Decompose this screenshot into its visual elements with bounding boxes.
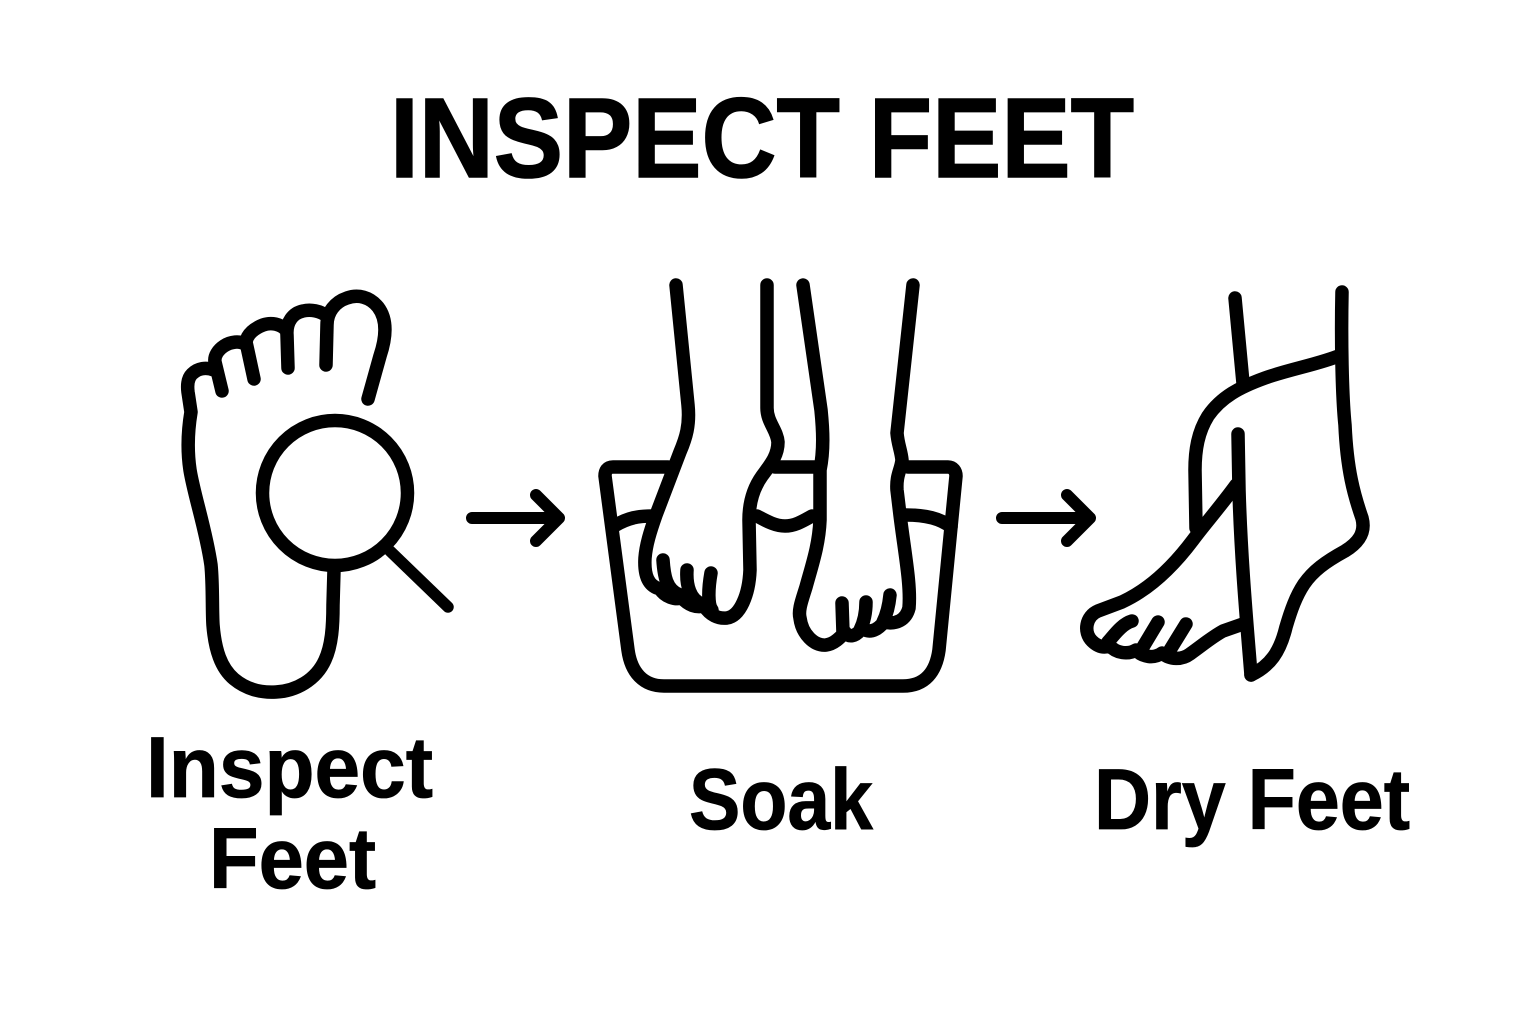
label: inspect feet: Feet — [209, 811, 376, 907]
label: inspect feet: Inspect — [146, 720, 433, 816]
magnifying glass handle — [390, 551, 448, 607]
arrow: inspect to soak — [472, 495, 559, 541]
label: dry feet: Dry Feet — [1094, 752, 1410, 848]
icon: feet soaking in basin — [605, 285, 956, 686]
left foot — [645, 285, 778, 618]
arrow: soak to dry feet — [1002, 495, 1090, 541]
water line — [616, 515, 951, 527]
top of foot and sole — [1087, 485, 1243, 658]
magnifying glass lens — [262, 420, 408, 566]
label: inspect feet — [146, 720, 433, 907]
label: soak: Soak — [689, 752, 873, 848]
foot outline and toes — [188, 296, 385, 692]
title: INSPECT FEET — [390, 75, 1134, 201]
towel edge — [1238, 434, 1251, 675]
towel top fold — [1195, 355, 1341, 528]
basin — [605, 467, 956, 686]
rear leg and heel edge — [1235, 292, 1363, 675]
right foot — [799, 285, 913, 645]
icon: foot with magnifying glass — [188, 296, 448, 692]
toe lines — [1108, 621, 1186, 650]
icon: drying foot — [1087, 292, 1363, 675]
